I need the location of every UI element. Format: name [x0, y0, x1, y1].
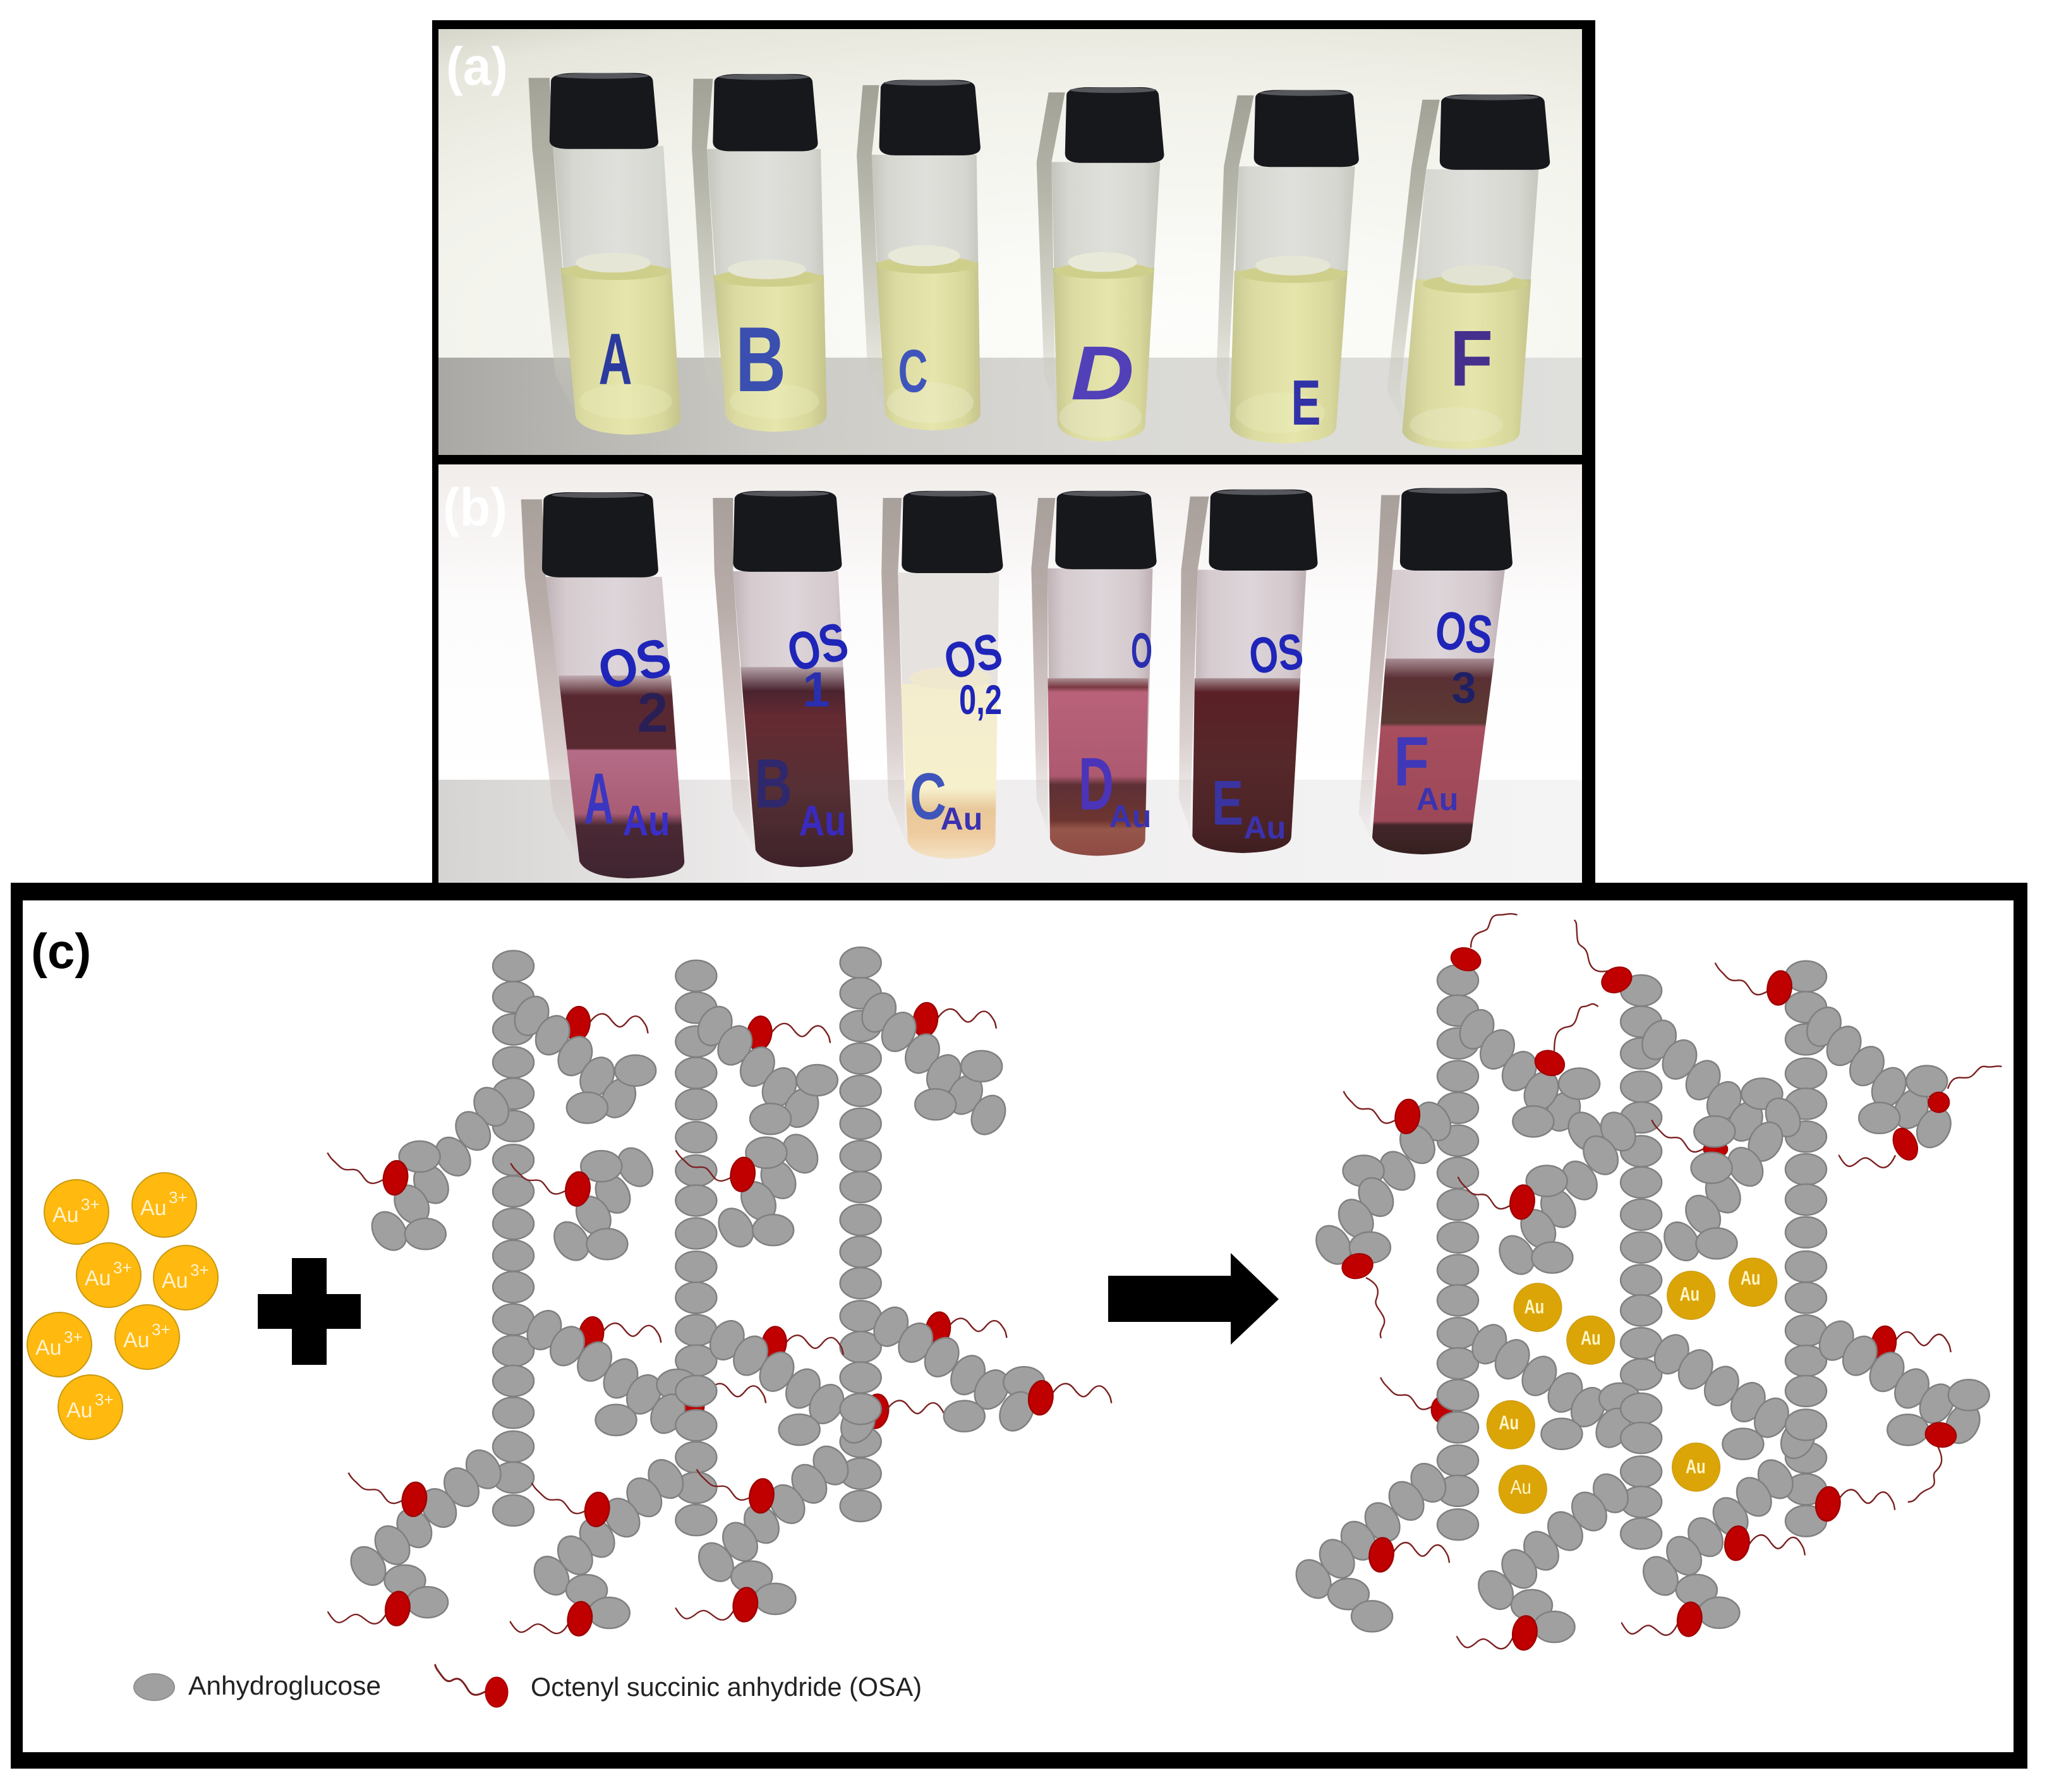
ion 2: [132, 1173, 196, 1237]
ion 3: 3+: [113, 1258, 132, 1277]
vial E gold: Au: [1244, 810, 1286, 845]
vial F gold: OS: [1432, 600, 1495, 665]
Au particle 2: Au: [1581, 1326, 1601, 1349]
ion 6: [115, 1305, 179, 1369]
tails behind: [1366, 914, 2002, 1502]
reaction arrow: [1108, 1253, 1279, 1345]
upper right branches: [508, 987, 1012, 1141]
ion 2: Au: [140, 1196, 167, 1220]
left and lower-left branches: [344, 1081, 855, 1628]
ion 1: [44, 1180, 109, 1244]
vial A gold: 2: [637, 681, 668, 744]
vial A gold: Au: [623, 797, 670, 845]
vial A gold: [521, 492, 684, 878]
vial E gold: [1179, 490, 1318, 853]
overlap units: [1621, 1393, 1827, 1453]
vial C: C: [898, 337, 927, 405]
photo b background: [438, 464, 1582, 883]
vial E: [1216, 90, 1359, 444]
ion 7: Au: [66, 1398, 93, 1422]
overlapping units on chains: [675, 1376, 1055, 1441]
ion 1: 3+: [81, 1195, 100, 1214]
vial F gold: [1359, 488, 1513, 854]
vial B gold: B: [754, 745, 792, 823]
vial B: [692, 74, 827, 432]
ion 5: [27, 1312, 92, 1377]
vial C gold: C: [910, 760, 946, 833]
gold nanoparticles: [1487, 1258, 1777, 1513]
vial C: [857, 80, 981, 430]
vial A: A: [599, 319, 632, 400]
vial E gold: E: [1212, 768, 1243, 838]
legend: OSA: [435, 1664, 922, 1707]
vial D gold: O: [1131, 622, 1152, 678]
middle branches: [1466, 1315, 1990, 1465]
ion 7: [58, 1375, 123, 1439]
starch OSA structure before reaction: [327, 947, 1111, 1637]
vial B gold: OS: [782, 611, 854, 684]
vial F gold: 3: [1452, 663, 1476, 712]
legend: OSA: Octenyl succinic anhydride (OSA): [531, 1672, 922, 1702]
Au particle 4: Au: [1741, 1266, 1761, 1289]
vial B gold: [713, 491, 854, 867]
Au particle 5: Au: [1499, 1411, 1519, 1434]
vertical chain 2: [1621, 975, 1662, 1549]
lower branches: [1289, 1453, 1800, 1642]
vial D: [1037, 87, 1164, 441]
vertical chain 1: [1437, 965, 1478, 1540]
vial D gold: D: [1078, 742, 1114, 826]
label (b): (b): [443, 478, 507, 537]
Au particle 1: [1514, 1283, 1562, 1331]
panel a: vials before gold: [438, 29, 1582, 455]
starch OSA structure with gold nanoparticles: [1289, 914, 2002, 1652]
ion 5: Au: [35, 1336, 62, 1360]
vial D gold: [1031, 491, 1157, 856]
ion 6: Au: [123, 1328, 150, 1352]
Au particle 4: [1729, 1258, 1777, 1306]
vial A gold: OS: [593, 627, 677, 702]
ion 6: 3+: [152, 1320, 171, 1339]
ion 3: Au: [85, 1266, 111, 1290]
vertical chain 3: [1785, 961, 1827, 1537]
Au particle 1: Au: [1525, 1295, 1544, 1318]
Au particle 5: [1487, 1401, 1535, 1449]
ion 2: 3+: [169, 1188, 188, 1207]
label (c): (c): [31, 923, 91, 979]
vial D gold: Au: [1109, 799, 1151, 834]
Au particle 6: Au: [1511, 1475, 1531, 1498]
vertical chain 1: [493, 950, 534, 1526]
OSA red units and tails: [1339, 945, 1958, 1652]
Au particle 7: Au: [1686, 1455, 1706, 1477]
middle right branches: [521, 1301, 1044, 1449]
Au particle 6: [1499, 1465, 1547, 1513]
ion 4: Au: [162, 1269, 188, 1293]
vial B gold: Au: [799, 797, 847, 845]
legend: anhydroglucose: Anhydroglucose: [188, 1671, 381, 1700]
frame: photo panels a and b: [432, 20, 1595, 892]
Au particle 3: [1667, 1271, 1715, 1319]
legend: [134, 1664, 922, 1707]
vial C gold: Au: [941, 801, 982, 837]
vial F: [1387, 94, 1550, 449]
left branches: [1309, 1096, 1604, 1281]
Au particle 2: [1567, 1316, 1615, 1364]
vial C gold: [881, 491, 1008, 859]
vial C gold: OS: [939, 622, 1008, 691]
plus sign: [258, 1258, 361, 1365]
panel c frame: [11, 883, 2027, 1769]
Au particle 7: [1672, 1443, 1720, 1491]
vial C gold: 0,2: [959, 676, 1002, 723]
ion 4: [154, 1245, 218, 1310]
photo a background: [438, 29, 1582, 455]
ion 5: 3+: [64, 1328, 83, 1347]
OSA red units and tails: [327, 1001, 1111, 1637]
vial F gold: Au: [1416, 782, 1458, 817]
ion 1: Au: [52, 1203, 79, 1227]
label (a): (a): [446, 37, 508, 96]
vial A gold: A: [584, 759, 614, 839]
vial B gold: 1: [802, 662, 830, 717]
vial E gold: OS: [1247, 623, 1306, 684]
upper branches: [1453, 1002, 1957, 1267]
vial B: B: [735, 308, 786, 411]
panel b: vials after gold: [438, 464, 1582, 883]
vertical chain 2: [675, 960, 716, 1535]
vial F: F: [1450, 315, 1493, 403]
vertical chain 3: [840, 947, 881, 1522]
vial A: [529, 73, 680, 435]
lower-red tail and unit behind middle branch: [1869, 1324, 1951, 1362]
ion 7: 3+: [95, 1390, 114, 1409]
gold ions Au3+: [27, 1173, 218, 1439]
Au particle 3: Au: [1679, 1283, 1700, 1305]
vial E: E: [1291, 368, 1320, 439]
ion 4: 3+: [190, 1261, 209, 1280]
panel c: reaction scheme: [11, 883, 2027, 1769]
ion 3: [76, 1243, 141, 1307]
vial F gold: F: [1394, 723, 1429, 801]
vial D: D: [1071, 330, 1134, 416]
